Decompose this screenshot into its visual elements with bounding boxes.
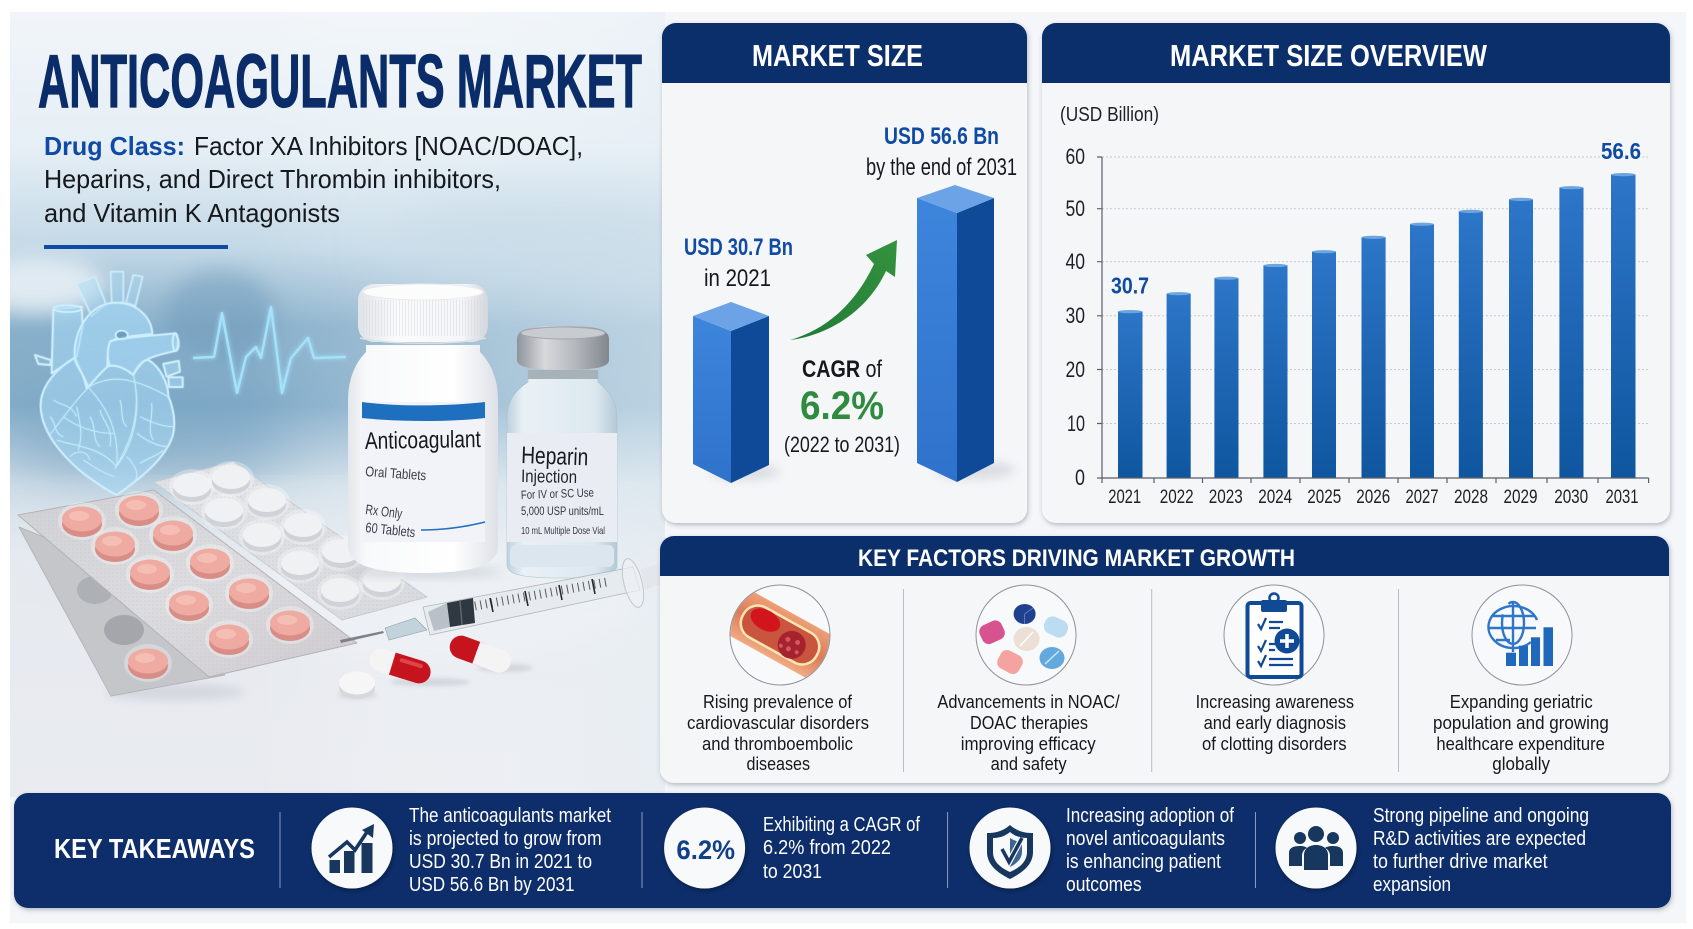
title: ANTICOAGULANTS MARKET xyxy=(38,39,642,123)
panel: hero photo xyxy=(10,12,665,797)
icon: 6.2% badge: 6.2% xyxy=(676,835,735,865)
icon: capsules and tablet xyxy=(337,632,533,699)
icon: growth chart xyxy=(312,808,392,888)
icon: shield xyxy=(970,808,1050,888)
bar chart: 20 xyxy=(1066,357,1085,382)
takeaway: market growth xyxy=(312,804,611,896)
factor: geriatric: globally xyxy=(1492,753,1551,774)
table reflection xyxy=(240,540,640,660)
factor: therapies xyxy=(937,585,1120,774)
subtitle: drug class: Factor XA Inhibitors [NOAC/DOAC], xyxy=(194,131,583,161)
label: years: (2022 to 2031) xyxy=(784,432,900,457)
factor: cardiovascular: Rising prevalence of xyxy=(703,691,853,712)
label: by the end of 2031: by the end of 2031 xyxy=(866,154,1017,181)
bar chart: 30 xyxy=(1066,303,1085,328)
heading: key factors: KEY FACTORS DRIVING MARKET GROWTH xyxy=(858,545,1295,572)
factor: therapies: DOAC therapies xyxy=(970,712,1088,733)
bar chart: 2024 xyxy=(1258,486,1292,508)
label: Injection: Injection xyxy=(521,466,577,487)
panel: key factors xyxy=(660,536,1669,783)
icon: clipboard xyxy=(1224,585,1324,685)
factor: awareness xyxy=(1196,585,1354,754)
takeaway: CAGR: 6.2% from 2022 xyxy=(763,836,891,859)
label: Heparin: Heparin xyxy=(521,442,589,471)
accent rule xyxy=(44,245,228,249)
icon: back blister pack xyxy=(154,461,427,620)
bar: 2031 xyxy=(917,185,1015,482)
subtitle: drug class xyxy=(44,131,583,228)
bar chart: 56.6 xyxy=(1601,138,1641,164)
takeaway: novel anticoagulants: outcomes xyxy=(1066,873,1142,896)
panel: key takeaways xyxy=(14,793,1671,908)
takeaway: market growth: USD 30.7 Bn in 2021 to xyxy=(409,850,592,873)
subtitle: drug class: and Vitamin K Antagonists xyxy=(44,198,340,228)
takeaway: market growth: USD 56.6 Bn by 2031 xyxy=(409,873,574,896)
bar chart: 2025 xyxy=(1307,486,1341,508)
bar chart: 2028 xyxy=(1454,486,1488,508)
bar chart: 2026 xyxy=(1356,486,1390,508)
label: 60 Tablets: 60 Tablets xyxy=(365,519,416,540)
factor: awareness: and early diagnosis xyxy=(1204,712,1346,733)
arrow: growth xyxy=(790,240,897,340)
bar chart xyxy=(1066,138,1649,508)
factor: geriatric: healthcare expenditure xyxy=(1436,733,1605,754)
factor: geriatric: population and growing xyxy=(1433,712,1609,733)
icon: heparin vial xyxy=(507,326,617,578)
bar chart: 2029 xyxy=(1504,486,1538,508)
factor: awareness: Increasing awareness xyxy=(1196,691,1354,712)
takeaway: pipeline: expansion xyxy=(1373,873,1451,896)
bar chart: 50 xyxy=(1066,196,1085,221)
takeaway: pipeline xyxy=(1276,804,1589,896)
takeaway: pipeline: R&D activities are expected xyxy=(1373,827,1586,850)
label: unit: (USD Billion) xyxy=(1060,104,1159,126)
icon: artery xyxy=(730,584,830,686)
factor: cardiovascular: diseases xyxy=(746,753,810,774)
icon: front blister pack xyxy=(18,490,357,677)
icon: globe and bars xyxy=(1472,585,1572,685)
label: use: For IV or SC Use xyxy=(521,485,594,502)
factor: geriatric xyxy=(1433,585,1609,774)
bar chart: 2021 xyxy=(1108,486,1141,508)
factor: awareness: of clotting disorders xyxy=(1202,733,1347,754)
takeaway: pipeline: Strong pipeline and ongoing xyxy=(1373,804,1589,827)
heading: overview: MARKET SIZE OVERVIEW xyxy=(1170,38,1488,73)
panel: market size overview xyxy=(1042,23,1670,523)
icon: ECG pulse line xyxy=(193,307,346,393)
icon: heart illustration xyxy=(35,272,183,495)
label: Oral Tablets: Oral Tablets xyxy=(365,463,427,483)
panel: market size xyxy=(662,23,1027,523)
heading: market size: MARKET SIZE xyxy=(752,38,923,73)
bar chart: 60 xyxy=(1066,144,1085,169)
label: USD 30.7 Bn: USD 30.7 Bn xyxy=(684,234,793,261)
takeaway: novel anticoagulants: is enhancing patient xyxy=(1066,850,1221,873)
subtitle: drug class: Heparins, and Direct Thrombin inhibitors, xyxy=(44,164,501,194)
takeaway: CAGR: to 2031 xyxy=(763,860,822,883)
icon: people xyxy=(1276,808,1356,888)
bar chart: 40 xyxy=(1066,249,1085,274)
icon: 6.2% badge xyxy=(664,808,745,888)
icon: syringe xyxy=(340,557,660,643)
takeaway: novel anticoagulants xyxy=(970,804,1234,896)
takeaway: novel anticoagulants: Increasing adoption of xyxy=(1066,804,1234,827)
factor: cardiovascular: and thromboembolic xyxy=(702,733,853,754)
takeaway: novel anticoagulants: novel anticoagulants xyxy=(1066,827,1225,850)
label: units: 5,000 USP units/mL xyxy=(521,504,604,518)
takeaway: market growth: The anticoagulants market xyxy=(409,804,611,827)
label: Anticoagulant: Anticoagulant xyxy=(365,426,481,455)
icon: pills xyxy=(976,585,1076,685)
label: dose: 10 mL Multiple Dose Vial xyxy=(521,525,605,537)
factor: cardiovascular: cardiovascular disorders xyxy=(687,712,869,733)
factor: therapies: improving efficacy xyxy=(961,733,1096,754)
icon: tablet bottle xyxy=(343,284,503,577)
bar chart: 30.7 xyxy=(1111,272,1149,298)
icon: lower blister pack xyxy=(19,527,245,700)
factor: geriatric: Expanding geriatric xyxy=(1450,691,1593,712)
bar chart: 2027 xyxy=(1406,486,1438,508)
takeaway: CAGR xyxy=(664,808,920,888)
bar chart: 2030 xyxy=(1554,486,1588,508)
takeaway: market growth: is projected to grow from xyxy=(409,827,602,850)
bar chart: 10 xyxy=(1067,411,1085,436)
bar chart: 2022 xyxy=(1160,486,1194,508)
takeaway: CAGR: Exhibiting a CAGR of xyxy=(763,813,920,836)
bar chart: 0 xyxy=(1075,465,1085,490)
factor: therapies: Advancements in NOAC/ xyxy=(937,691,1120,712)
takeaway: pipeline: to further drive market xyxy=(1373,850,1548,873)
label: USD 56.6 Bn: USD 56.6 Bn xyxy=(884,123,999,150)
value: 6.2%: 6.2% xyxy=(800,384,884,428)
subtitle: drug class: Drug Class: xyxy=(44,131,185,161)
label: in 2021: in 2021 xyxy=(704,265,771,292)
bar: 2021 xyxy=(693,302,780,483)
bar chart: 2031 xyxy=(1606,486,1638,508)
label: Rx Only: Rx Only xyxy=(365,501,403,521)
heading: key takeaways: KEY TAKEAWAYS xyxy=(54,833,255,864)
factor: therapies: and safety xyxy=(991,753,1067,774)
bar chart: 2023 xyxy=(1209,486,1243,508)
label: CAGR: CAGR of xyxy=(802,356,882,383)
factor: cardiovascular xyxy=(687,579,869,774)
